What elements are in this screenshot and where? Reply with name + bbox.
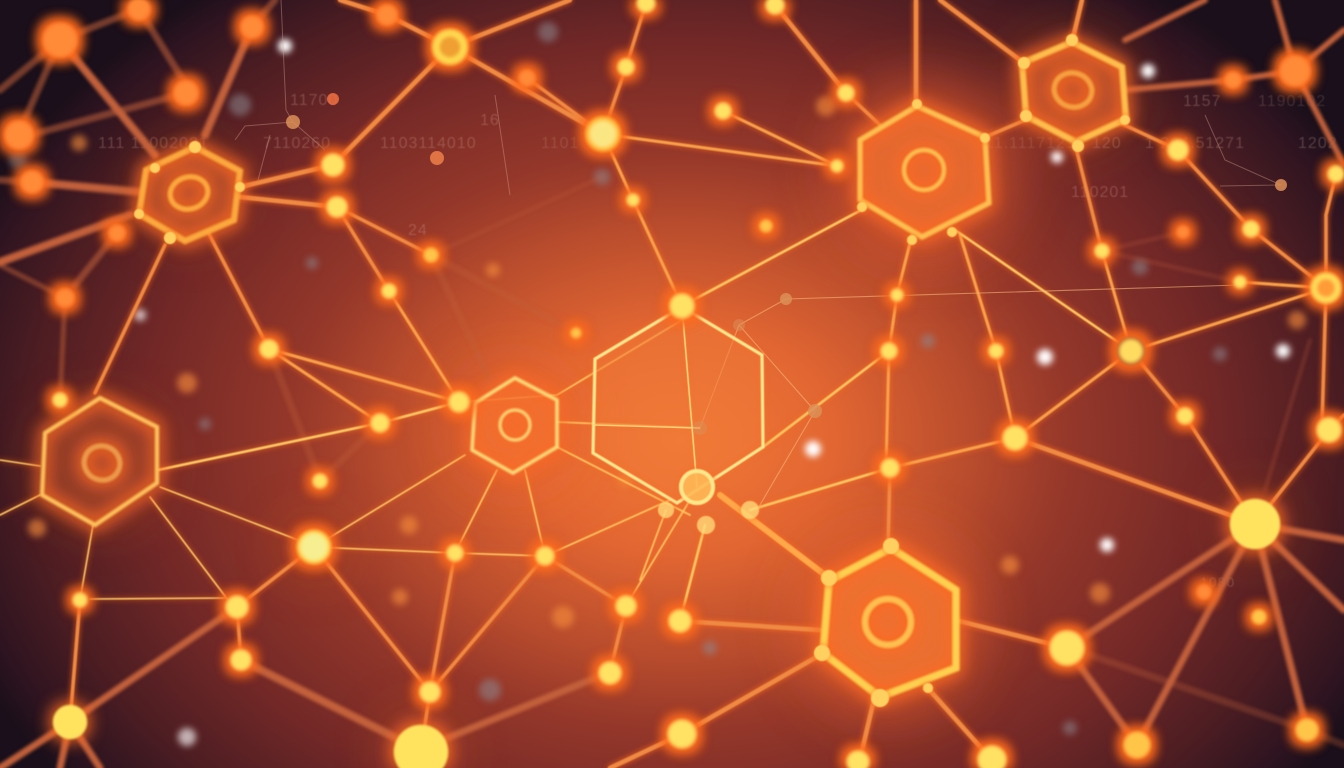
hexagon: top left: [139, 147, 240, 241]
faint numerals: [98, 92, 1338, 590]
amber nodes: [424, 220, 1318, 758]
faint numerals: 7110260: [263, 135, 331, 152]
faint numerals: 11.1117121: [985, 135, 1076, 152]
faint numerals: 11700: [290, 92, 338, 109]
large bright nodes: [53, 499, 1280, 768]
hexagon corner nodes: [134, 34, 1130, 707]
orange nodes: [5, 0, 1310, 599]
hexagon: large centre: [593, 307, 763, 503]
hexagon: bottom: [823, 548, 956, 697]
hexagon: centre small: [472, 378, 557, 473]
faint numerals: 1202: [1298, 135, 1338, 152]
links over large hexagon: [593, 306, 700, 487]
faint numerals: 1 204.51271: [1145, 135, 1245, 152]
faint numerals: 111 11002021: [98, 135, 209, 152]
hexagon: top centre right: [860, 106, 989, 237]
thin bright links: [0, 208, 1131, 621]
faint numerals: 1190102: [1258, 93, 1326, 110]
hexagon: left: [42, 398, 157, 525]
small dim nodes: [286, 93, 1287, 435]
faint numerals: 1103114010: [380, 135, 477, 152]
faint thin links: [700, 285, 1240, 510]
ringed nodes: [299, 33, 1338, 562]
faint numerals: 110201: [1071, 184, 1129, 201]
hexagon: top right: [1022, 42, 1126, 142]
faint numerals: 1101: [541, 135, 579, 152]
faint numerals: 24: [408, 222, 428, 239]
hub ring node: [681, 471, 713, 503]
faint numerals: 1157: [1183, 93, 1221, 110]
pale nodes near hub: [658, 501, 759, 534]
faint numerals: 1080: [1200, 574, 1235, 590]
faint numerals: 16: [480, 112, 500, 129]
faint numerals: 120: [1092, 135, 1122, 152]
thin scribble traces: [235, 0, 1281, 195]
